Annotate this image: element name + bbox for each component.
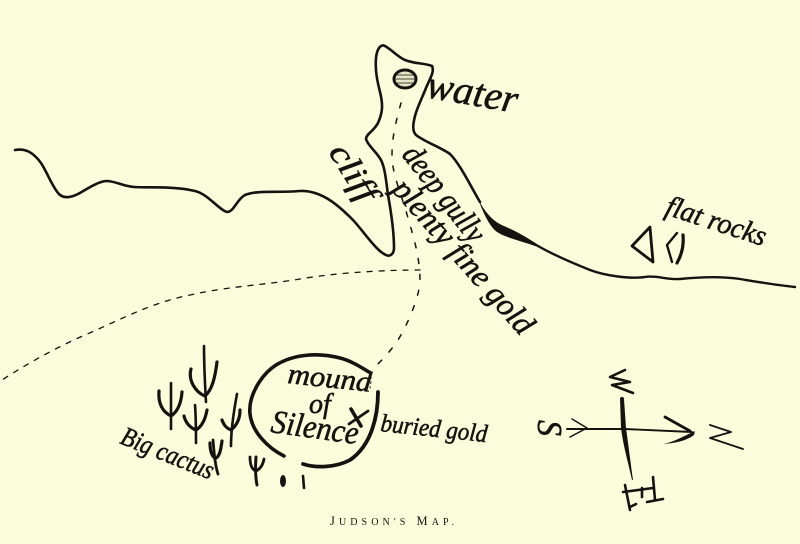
label: deep gully: deep gully [395, 137, 494, 250]
compass letter S: S [530, 420, 568, 436]
label: Big cactus: Big cactus [117, 421, 219, 485]
east-west arrow [567, 429, 692, 432]
dotted trail [2, 103, 420, 380]
label: flat rocks: flat rocks [662, 190, 771, 253]
icon: cactus group [159, 346, 304, 488]
compass letter N [710, 425, 743, 449]
label: mound of Silence: Silence [269, 404, 361, 452]
mound of silence circle [250, 355, 378, 467]
icon: flat rocks [632, 227, 683, 263]
caption: J UDSON'S M AP. [330, 514, 455, 528]
water hole [394, 70, 416, 88]
label: cliff: cliff [321, 137, 388, 213]
label: mound of Silence [269, 358, 374, 452]
label: mound of Silence: of [309, 389, 334, 420]
label: mound of Silence: mound [286, 358, 374, 399]
label: buried gold: buried gold [379, 410, 489, 448]
compass letter W [610, 370, 633, 393]
x marks the buried gold [349, 409, 368, 426]
compass letter E [623, 477, 663, 510]
compass rose [530, 370, 743, 510]
label: water: water [423, 62, 522, 122]
north-south axis [620, 397, 633, 480]
label: plenty fine gold: plenty fine gold [384, 169, 543, 342]
terrain outline: canyon and ridge [15, 46, 795, 287]
